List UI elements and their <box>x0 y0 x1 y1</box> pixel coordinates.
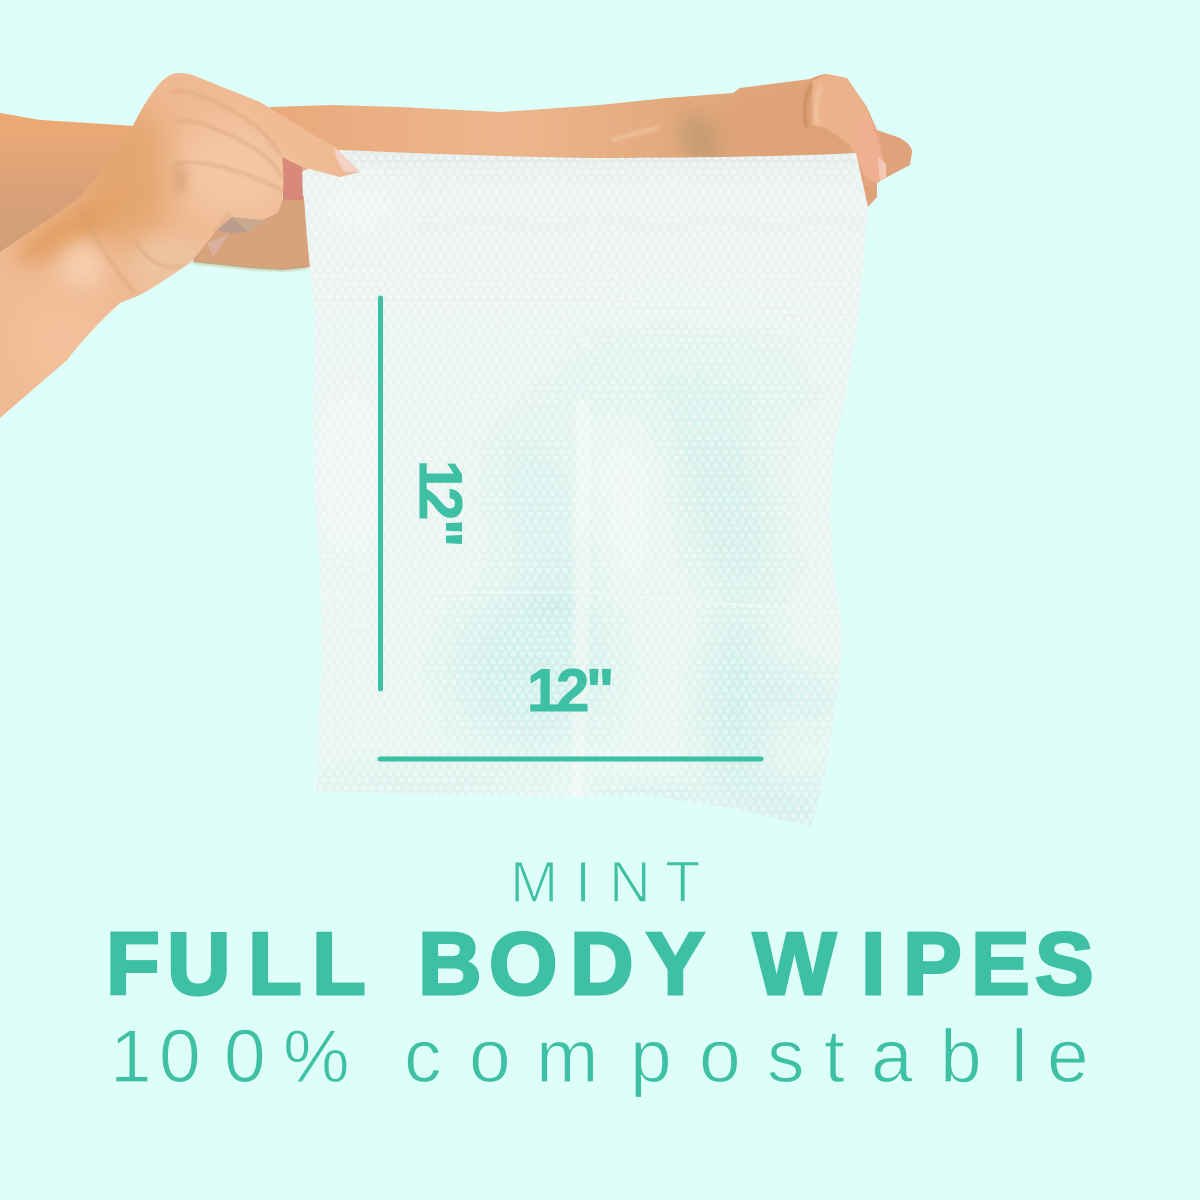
thumbnail <box>334 146 360 172</box>
upper forearm <box>270 94 720 175</box>
back arm behind the fist <box>0 113 320 270</box>
label: width 12 inches: 12" <box>527 657 614 724</box>
wipe <box>295 145 880 835</box>
finger behind the wipe edge <box>282 157 303 200</box>
wipe creases <box>340 339 828 612</box>
horizontal dimension line <box>380 756 761 762</box>
heading: full body wipes: FULL BODY WIPES <box>106 914 1094 1013</box>
subheading: 100% compostable: 100% compostable <box>110 1014 1089 1098</box>
wipe shading <box>300 148 870 831</box>
finger creases <box>78 91 283 293</box>
index finger <box>812 74 885 184</box>
heading: mint: MINT <box>510 850 700 915</box>
label: height 12 inches: 12" <box>407 460 474 547</box>
left hand and front arm <box>0 60 370 430</box>
thumb behind finger <box>882 135 912 177</box>
vertical dimension line <box>378 298 383 689</box>
curled fingertips under the fist <box>207 217 268 257</box>
right hand <box>600 70 920 210</box>
